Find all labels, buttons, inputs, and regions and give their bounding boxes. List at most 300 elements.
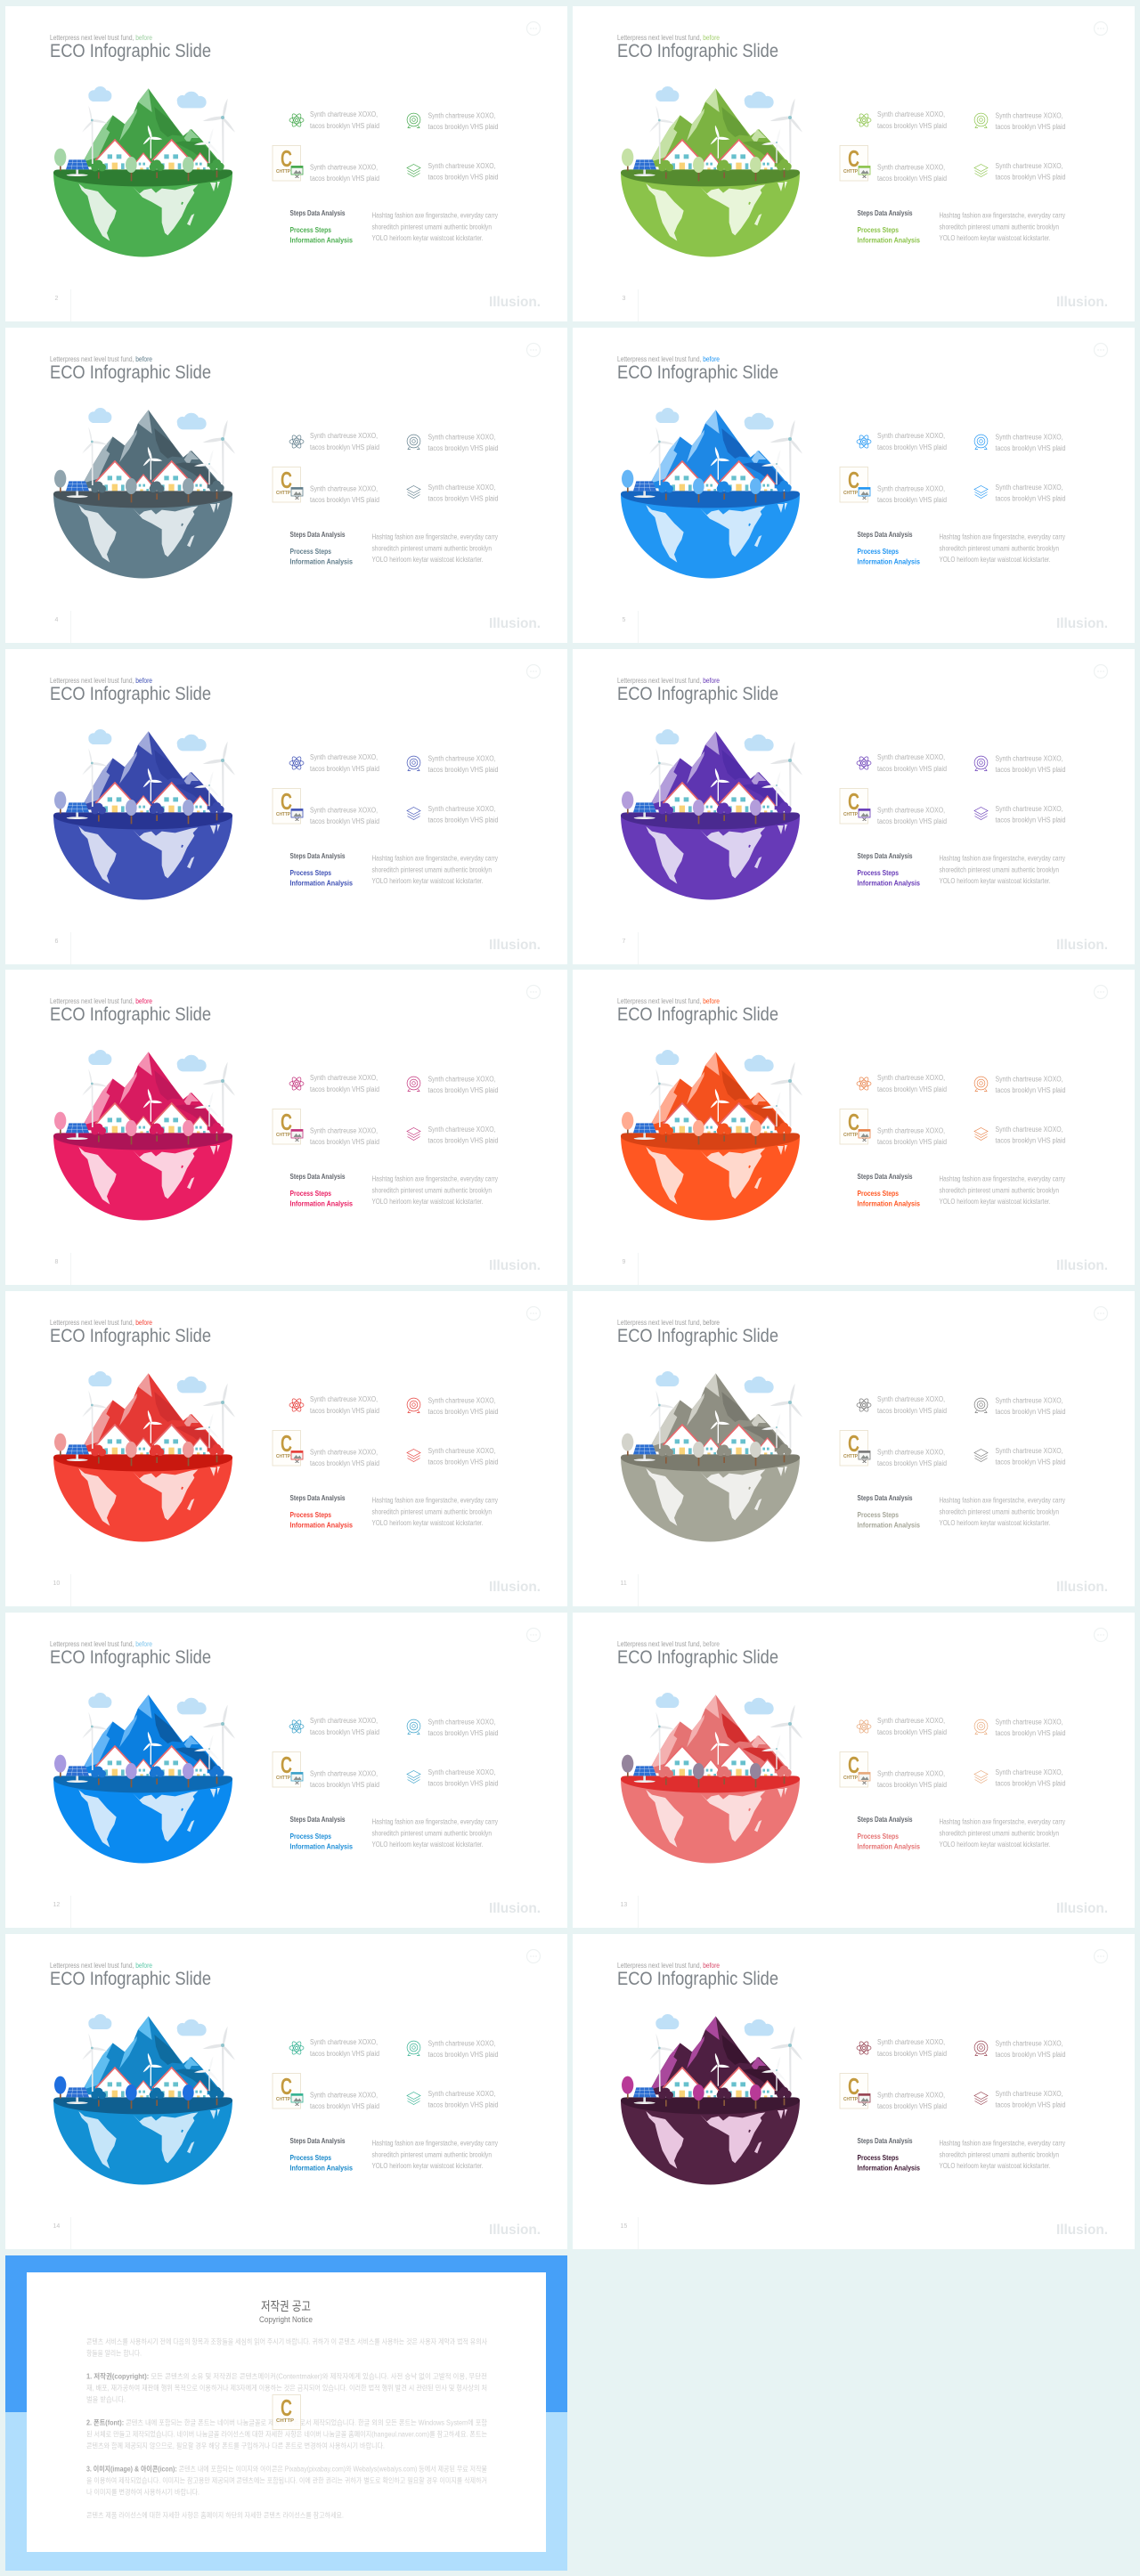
feature text 2: Synth chartreuse XOXO,	[996, 433, 1063, 442]
feature text 1	[877, 110, 947, 130]
logo placeholder	[840, 145, 870, 181]
feature text 3: Synth chartreuse XOXO,	[877, 2091, 945, 2100]
section: images and icons: 을 이용하여 제작되었습니다. 이미지는 참고용만 제공되며 콘텐츠에는 포함됩니다. 이에 관한 권리는 귀하가 별도로 확인하고 필요할 경우 이미지를 삭제하거	[86, 2475, 487, 2484]
feature text 4: tacos brooklyn VHS plaid	[996, 1459, 1065, 1466]
steps labels: Process Steps	[857, 547, 899, 556]
feature text 2: tacos brooklyn VHS plaid	[428, 1729, 499, 1737]
steps labels: Process Steps	[290, 547, 331, 556]
logo placeholder: CHTTP	[276, 1133, 291, 1138]
steps labels: Information Analysis	[290, 1199, 353, 1207]
feature text 2: Synth chartreuse XOXO,	[428, 112, 495, 119]
feature text 1: tacos brooklyn VHS plaid	[877, 443, 947, 451]
feature text 1: Synth chartreuse XOXO,	[310, 2038, 378, 2046]
description paragraph	[939, 212, 1065, 242]
feature text 4: Synth chartreuse XOXO,	[428, 162, 495, 170]
steps labels	[290, 209, 353, 244]
steps labels: Steps Data Analysis	[290, 209, 346, 217]
slide subtitle: Letterpress next level trust fund, before	[50, 1318, 152, 1327]
feature text 2: tacos brooklyn VHS plaid	[428, 444, 499, 452]
steps labels: Process Steps	[857, 225, 899, 234]
steps labels: Information Analysis	[857, 878, 920, 887]
description paragraph: shoreditch pinterest umami authentic brooklyn	[372, 1508, 492, 1516]
feature text 1: Synth chartreuse XOXO,	[877, 1395, 945, 1403]
page number: 8	[55, 1259, 59, 1265]
steps labels	[857, 209, 920, 244]
feature text 3: Synth chartreuse XOXO,	[310, 164, 378, 171]
logo placeholder: CHTTP	[843, 169, 859, 175]
feature text 2: Synth chartreuse XOXO,	[996, 1396, 1063, 1405]
feature text 1: tacos brooklyn VHS plaid	[310, 122, 379, 130]
feature text 4: Synth chartreuse XOXO,	[428, 1768, 495, 1776]
description paragraph: Hashtag fashion axe fingerstache, everyday carry	[939, 855, 1065, 862]
feature text 1	[310, 1074, 379, 1093]
feature text 3	[877, 1770, 947, 1789]
icon: layers	[407, 1770, 420, 1783]
intro paragraph: 콘텐츠 서비스를 사용하시기 전에 다음의 항목과 조항들을 세심히 읽어 주시기 바랍니다. 귀하가 이 콘텐츠 서비스를 사용하는 것은 사용자 계약과 법적 유의사	[86, 2336, 488, 2345]
feature text 4	[428, 2090, 499, 2109]
logo placeholder	[273, 1109, 303, 1144]
feature text 3: Synth chartreuse XOXO,	[310, 484, 378, 493]
slide title: ECO Infographic Slide	[50, 1326, 211, 1346]
feature text 4	[428, 1447, 499, 1466]
feature text 1: tacos brooklyn VHS plaid	[310, 1407, 379, 1415]
icon: atom	[857, 1076, 871, 1092]
logo placeholder: CHTTP	[276, 812, 291, 817]
icon: atom	[857, 1397, 871, 1413]
description paragraph	[372, 855, 498, 885]
illustration: earth hemisphere with mountains and houses	[53, 408, 235, 578]
icon: target	[974, 1077, 988, 1092]
illustration: earth hemisphere with mountains and houses	[53, 729, 235, 899]
steps labels: Information Analysis	[857, 235, 920, 244]
logo placeholder: C	[848, 467, 859, 493]
logo placeholder: C	[281, 2073, 292, 2100]
logo placeholder	[273, 467, 303, 502]
feature text 4: tacos brooklyn VHS plaid	[428, 816, 499, 825]
feature text 2: Synth chartreuse XOXO,	[996, 1719, 1063, 1726]
feature text 1: Synth chartreuse XOXO,	[877, 753, 945, 761]
feature text 2: Synth chartreuse XOXO,	[428, 1396, 495, 1405]
description paragraph: Hashtag fashion axe fingerstache, everyday carry	[372, 1175, 498, 1182]
description paragraph: Hashtag fashion axe fingerstache, everyday carry	[372, 1496, 498, 1505]
feature text 2: tacos brooklyn VHS plaid	[996, 2051, 1065, 2059]
icon: atom	[289, 755, 304, 771]
page number: 3	[622, 296, 625, 302]
menu dots icon	[1094, 985, 1108, 999]
feature text 3: tacos brooklyn VHS plaid	[877, 175, 947, 183]
illustration: earth hemisphere with mountains and houses	[53, 1371, 235, 1541]
menu dots icon	[1094, 1628, 1108, 1642]
feature text 4	[428, 1125, 499, 1145]
feature text 1	[877, 432, 947, 451]
description paragraph	[939, 1818, 1065, 1849]
illustration: earth hemisphere with mountains and houses	[53, 1693, 235, 1863]
feature text 2	[996, 112, 1065, 131]
feature text 3	[310, 164, 379, 183]
description paragraph: shoreditch pinterest umami authentic brooklyn	[939, 865, 1059, 874]
steps labels: Process Steps	[857, 2153, 899, 2162]
slide title: ECO Infographic Slide	[50, 1647, 211, 1668]
logo placeholder	[273, 2394, 301, 2429]
feature text 1: Synth chartreuse XOXO,	[877, 1717, 945, 1725]
feature text 4: Synth chartreuse XOXO,	[428, 1125, 495, 1134]
steps labels: Steps Data Analysis	[290, 531, 346, 539]
description paragraph	[372, 1175, 498, 1206]
feature text 3: tacos brooklyn VHS plaid	[877, 1138, 947, 1146]
slide subtitle: Letterpress next level trust fund, before	[617, 354, 720, 363]
icon: layers	[407, 1127, 420, 1140]
slide subtitle: Letterpress next level trust fund, before	[617, 996, 720, 1005]
steps labels: Process Steps	[857, 868, 899, 877]
page number: 9	[622, 1259, 625, 1265]
icon: target	[407, 2041, 420, 2055]
section: copyright: 벌을 받습니다.	[86, 2395, 126, 2404]
feature text 3: Synth chartreuse XOXO,	[877, 1770, 945, 1777]
feature text 2: tacos brooklyn VHS plaid	[428, 123, 499, 131]
description paragraph: YOLO heirloom keytar waistcoat kickstarter.	[372, 1198, 483, 1206]
icon: atom	[857, 2040, 871, 2056]
steps labels: Steps Data Analysis	[857, 1173, 913, 1181]
feature text 4: Synth chartreuse XOXO,	[996, 1447, 1063, 1455]
feature text 4: tacos brooklyn VHS plaid	[996, 1136, 1065, 1145]
page number: 11	[620, 1581, 627, 1587]
feature text 4	[428, 1768, 499, 1788]
feature text 4: Synth chartreuse XOXO,	[996, 484, 1063, 492]
feature text 3: Synth chartreuse XOXO,	[877, 1127, 945, 1134]
feature text 1	[310, 2038, 379, 2058]
icon: atom	[857, 1719, 871, 1735]
feature text 3: Synth chartreuse XOXO,	[310, 1448, 378, 1457]
logo placeholder	[273, 1751, 303, 1787]
section: copyright: 1. 저작권(copyright): 모든 콘텐츠의 소유 및 저작권은 콘텐츠메이커(Contentmaker)와 제작자에게 있습니다. 사전 승낙 없이 고발적 이용, 무단전	[86, 2372, 487, 2381]
steps labels: Steps Data Analysis	[290, 2137, 346, 2145]
feature text 2: tacos brooklyn VHS plaid	[996, 1408, 1065, 1416]
icon: layers	[407, 807, 420, 819]
feature text 4: tacos brooklyn VHS plaid	[428, 173, 499, 182]
feature text 1: Synth chartreuse XOXO,	[310, 1074, 378, 1082]
slide title: ECO Infographic Slide	[50, 1004, 211, 1025]
slide title: ECO Infographic Slide	[50, 684, 211, 704]
logo placeholder: C	[281, 467, 292, 493]
description paragraph: Hashtag fashion axe fingerstache, everyday carry	[939, 1496, 1065, 1505]
notice title: 저작권 공고	[261, 2299, 311, 2313]
section: fonts: 콘텐츠와 함께 제공되지 않으므로, 필요할 경우 해당 폰트를 구입하거나 다른 폰트로 변경하여 사용하시기 바랍니다.	[86, 2442, 385, 2450]
description paragraph: YOLO heirloom keytar waistcoat kickstarter.	[372, 234, 483, 242]
feature text 3	[877, 1127, 947, 1146]
notice subtitle: Copyright Notice	[259, 2315, 313, 2324]
feature text 3: tacos brooklyn VHS plaid	[310, 175, 379, 183]
description paragraph	[939, 2139, 1065, 2170]
description paragraph: shoreditch pinterest umami authentic brooklyn	[939, 1508, 1059, 1516]
slide subtitle: Letterpress next level trust fund, before	[50, 996, 152, 1005]
logo placeholder: CHTTP	[276, 491, 291, 496]
steps labels: Steps Data Analysis	[290, 1816, 346, 1824]
slide title: ECO Infographic Slide	[617, 362, 778, 383]
feature text 3: tacos brooklyn VHS plaid	[877, 1459, 947, 1467]
steps labels	[290, 2137, 353, 2173]
feature text 4: Synth chartreuse XOXO,	[428, 484, 495, 492]
feature text 4: Synth chartreuse XOXO,	[996, 162, 1063, 170]
illustration: earth hemisphere with mountains and houses	[621, 1693, 802, 1863]
icon: layers	[974, 807, 988, 819]
feature text 4	[996, 162, 1065, 182]
steps labels: Information Analysis	[857, 2164, 920, 2173]
steps labels: Process Steps	[290, 868, 331, 877]
logo placeholder	[840, 788, 870, 824]
feature text 2: tacos brooklyn VHS plaid	[996, 766, 1065, 774]
logo placeholder: CHTTP	[843, 812, 859, 817]
description paragraph	[939, 1175, 1065, 1206]
brand wordmark: Illusion.	[489, 2223, 541, 2238]
feature text 1	[877, 1395, 947, 1415]
slide title: ECO Infographic Slide	[50, 41, 211, 61]
feature text 3: tacos brooklyn VHS plaid	[310, 2102, 379, 2110]
description paragraph: YOLO heirloom keytar waistcoat kickstarter.	[372, 2162, 483, 2170]
feature text 4	[996, 805, 1065, 825]
page number: 12	[53, 1902, 60, 1908]
icon: layers	[974, 1127, 988, 1140]
feature text 4	[996, 1768, 1065, 1788]
illustration: earth hemisphere with mountains and houses	[621, 729, 802, 899]
steps labels	[857, 1173, 920, 1207]
steps labels: Steps Data Analysis	[290, 1494, 346, 1502]
feature text 1: Synth chartreuse XOXO,	[877, 2038, 945, 2046]
steps labels: Steps Data Analysis	[857, 852, 913, 860]
description paragraph	[939, 855, 1065, 885]
steps labels	[290, 1173, 353, 1207]
logo placeholder: C	[281, 1430, 292, 1457]
logo placeholder: CHTTP	[843, 2097, 859, 2102]
steps labels: Steps Data Analysis	[857, 1816, 913, 1824]
panel: bright blue slide 12	[5, 1613, 567, 1928]
description paragraph	[372, 1818, 498, 1849]
description paragraph: YOLO heirloom keytar waistcoat kickstarter.	[372, 1519, 483, 1527]
section: fonts: 2. 폰트(font): 콘텐츠 내에 포함되는 한글 폰트는 네이버 나눔글꼴로 제공된 폰트로서 제작되었습니다. 한글 외의 모든 폰트는 Windows System에 포함	[86, 2418, 488, 2427]
menu dots icon	[1094, 344, 1108, 356]
icon: layers	[974, 486, 988, 499]
icon: layers	[974, 1450, 988, 1462]
page number: 4	[55, 617, 59, 623]
icon: atom	[289, 1719, 304, 1735]
feature text 2: tacos brooklyn VHS plaid	[428, 2051, 499, 2059]
logo placeholder: CHTTP	[276, 1776, 291, 1781]
feature text 1: tacos brooklyn VHS plaid	[877, 122, 947, 130]
description paragraph: Hashtag fashion axe fingerstache, everyday carry	[372, 1818, 498, 1825]
menu dots icon	[527, 664, 540, 679]
brand wordmark: Illusion.	[1056, 2223, 1108, 2238]
feature text 1: tacos brooklyn VHS plaid	[310, 1085, 379, 1093]
description paragraph: Hashtag fashion axe fingerstache, everyday carry	[939, 2139, 1065, 2148]
logo placeholder	[273, 1430, 303, 1466]
description paragraph	[939, 532, 1065, 564]
feature text 4: tacos brooklyn VHS plaid	[428, 2101, 499, 2109]
description paragraph: shoreditch pinterest umami authentic brooklyn	[372, 223, 492, 232]
feature text 2: Synth chartreuse XOXO,	[996, 755, 1063, 762]
icon: layers	[407, 1450, 420, 1462]
feature text 2: tacos brooklyn VHS plaid	[428, 1408, 499, 1416]
feature text 4: tacos brooklyn VHS plaid	[996, 816, 1065, 825]
feature text 4: Synth chartreuse XOXO,	[996, 1125, 1063, 1134]
slide subtitle: Letterpress next level trust fund, before	[50, 33, 152, 42]
brand wordmark: Illusion.	[1056, 1580, 1108, 1595]
feature text 2	[996, 433, 1065, 452]
feature text 4	[996, 1447, 1065, 1466]
panel: teal blue slide 14	[5, 1934, 567, 2249]
brand wordmark: Illusion.	[1056, 616, 1108, 631]
logo placeholder: C	[848, 2073, 859, 2100]
icon: layers	[407, 486, 420, 499]
feature text 4: tacos brooklyn VHS plaid	[996, 495, 1065, 502]
section: images and icons: 나 이미지를 변경하여 사용하시기 바랍니다.	[86, 2488, 200, 2497]
feature text 4: tacos brooklyn VHS plaid	[428, 1779, 499, 1788]
feature text 3	[310, 1448, 379, 1467]
feature text 1	[310, 432, 379, 451]
steps labels: Information Analysis	[857, 1841, 920, 1850]
brand wordmark: Illusion.	[1056, 1258, 1108, 1273]
panel: purple slide 7	[573, 649, 1135, 964]
feature text 2: Synth chartreuse XOXO,	[428, 433, 495, 442]
logo placeholder	[840, 467, 870, 502]
feature text 3	[877, 1448, 947, 1467]
illustration: earth hemisphere with mountains and houses	[621, 86, 802, 256]
panel: salmon slide 13	[573, 1613, 1135, 1928]
description paragraph: shoreditch pinterest umami authentic brooklyn	[372, 1186, 492, 1195]
icon: layers	[407, 164, 420, 176]
feature text 3: Synth chartreuse XOXO,	[877, 164, 945, 171]
description paragraph	[372, 2139, 498, 2170]
slide title: ECO Infographic Slide	[617, 1004, 778, 1025]
brand wordmark: Illusion.	[489, 616, 541, 631]
steps labels	[857, 1816, 920, 1850]
feature text 4: Synth chartreuse XOXO,	[996, 1768, 1063, 1776]
feature text 2: tacos brooklyn VHS plaid	[428, 766, 499, 774]
menu dots icon	[1094, 21, 1108, 36]
feature text 2	[428, 2039, 499, 2059]
panel: khaki grey slide 11	[573, 1291, 1135, 1606]
page number: 5	[622, 617, 625, 623]
feature text 3: Synth chartreuse XOXO,	[877, 484, 945, 493]
feature text 1: tacos brooklyn VHS plaid	[310, 1728, 379, 1736]
feature text 3: tacos brooklyn VHS plaid	[310, 817, 379, 825]
feature text 1	[310, 110, 379, 130]
logo placeholder	[840, 2073, 870, 2109]
feature text 1: tacos brooklyn VHS plaid	[877, 1728, 947, 1736]
feature text 3: tacos brooklyn VHS plaid	[877, 817, 947, 825]
feature text 4: Synth chartreuse XOXO,	[996, 805, 1063, 813]
steps labels: Steps Data Analysis	[857, 1494, 913, 1502]
description paragraph: YOLO heirloom keytar waistcoat kickstarter.	[372, 556, 483, 564]
logo placeholder: CHTTP	[843, 1454, 859, 1459]
feature text 1: tacos brooklyn VHS plaid	[310, 765, 379, 773]
feature text 2	[428, 433, 499, 452]
icon: target	[407, 1077, 420, 1092]
menu dots icon	[1094, 664, 1108, 679]
feature text 4: Synth chartreuse XOXO,	[428, 2090, 495, 2098]
closing note: 콘텐츠 제품 라이선스에 대한 자세한 사항은 홈페이지 하단의 자세한 콘텐츠 라이선스를 참고하세요.	[86, 2511, 344, 2520]
feature text 2: Synth chartreuse XOXO,	[996, 112, 1063, 119]
icon: layers	[974, 2092, 988, 2105]
feature text 1: Synth chartreuse XOXO,	[877, 110, 945, 118]
feature text 4: Synth chartreuse XOXO,	[428, 1447, 495, 1455]
description paragraph: YOLO heirloom keytar waistcoat kickstarter.	[939, 556, 1051, 564]
description paragraph: shoreditch pinterest umami authentic brooklyn	[372, 545, 492, 552]
illustration: earth hemisphere with mountains and houses	[621, 1050, 802, 1220]
feature text 2	[428, 755, 499, 774]
menu dots icon	[527, 1307, 540, 1320]
feature text 2	[428, 1396, 499, 1416]
feature text 1: Synth chartreuse XOXO,	[310, 753, 378, 761]
illustration: earth hemisphere with mountains and houses	[621, 1371, 802, 1541]
slide title: ECO Infographic Slide	[50, 1969, 211, 1989]
description paragraph	[372, 1496, 498, 1527]
menu dots icon	[1094, 1950, 1108, 1962]
steps labels: Process Steps	[290, 1510, 331, 1519]
illustration: earth hemisphere with mountains and houses	[53, 2014, 235, 2184]
description paragraph: Hashtag fashion axe fingerstache, everyday carry	[372, 2139, 498, 2148]
feature text 3	[877, 2091, 947, 2110]
steps labels	[290, 1816, 353, 1850]
intro paragraph	[86, 2336, 488, 2358]
brand wordmark: Illusion.	[489, 1258, 541, 1273]
description paragraph: YOLO heirloom keytar waistcoat kickstarter.	[939, 1519, 1051, 1527]
logo placeholder: CHTTP	[843, 1133, 859, 1138]
steps labels: Information Analysis	[290, 235, 353, 244]
feature text 3	[310, 807, 379, 825]
logo placeholder	[273, 2073, 303, 2109]
steps labels: Process Steps	[290, 1189, 331, 1198]
feature text 3: tacos brooklyn VHS plaid	[310, 496, 379, 504]
slide subtitle: Letterpress next level trust fund, before	[50, 354, 152, 363]
slide title: ECO Infographic Slide	[50, 362, 211, 383]
description paragraph: shoreditch pinterest umami authentic brooklyn	[939, 2151, 1059, 2158]
slide subtitle: Letterpress next level trust fund, before	[617, 33, 720, 42]
feature text 1: Synth chartreuse XOXO,	[310, 1717, 378, 1725]
steps labels: Information Analysis	[290, 1521, 353, 1530]
page number: 14	[53, 2223, 60, 2230]
feature text 2	[996, 1396, 1065, 1416]
feature text 1	[877, 753, 947, 773]
steps labels: Process Steps	[290, 2153, 331, 2162]
slide title: ECO Infographic Slide	[617, 684, 778, 704]
illustration: earth hemisphere with mountains and houses	[53, 1050, 235, 1220]
brand wordmark: Illusion.	[489, 938, 541, 953]
section: fonts	[86, 2418, 488, 2450]
brand wordmark: Illusion.	[489, 295, 541, 310]
slide title: ECO Infographic Slide	[617, 1969, 778, 1989]
feature text 4	[996, 1125, 1065, 1145]
steps labels	[857, 1494, 920, 1530]
steps labels: Process Steps	[857, 1189, 899, 1198]
feature text 3: Synth chartreuse XOXO,	[310, 1127, 378, 1134]
section: copyright	[86, 2372, 487, 2404]
icon: target	[974, 1719, 988, 1735]
feature text 3	[310, 1770, 379, 1789]
section: fonts: 된 서체로 만들고 제작되었습니다. 네이버 나눔글꼴 라이선스에 대한 자세한 사항은 네이버 나눔글꼴 홈페이지(hangeul.naver.com)를 참고하세요. 폰트는	[86, 2429, 487, 2438]
white notice card	[27, 2272, 546, 2552]
panel: blue grey slide 4	[5, 328, 567, 643]
panel: green slide 2	[5, 6, 567, 321]
description paragraph: shoreditch pinterest umami authentic brooklyn	[939, 223, 1059, 232]
description paragraph: YOLO heirloom keytar waistcoat kickstarter.	[372, 1841, 483, 1849]
icon: layers	[974, 164, 988, 176]
feature text 1: Synth chartreuse XOXO,	[877, 1074, 945, 1082]
panel: red slide 10	[5, 1291, 567, 1606]
description paragraph: Hashtag fashion axe fingerstache, everyday carry	[372, 855, 498, 862]
steps labels	[290, 852, 353, 887]
description paragraph: shoreditch pinterest umami authentic brooklyn	[939, 1186, 1059, 1195]
feature text 2: tacos brooklyn VHS plaid	[428, 1086, 499, 1094]
section: images and icons	[86, 2465, 487, 2497]
